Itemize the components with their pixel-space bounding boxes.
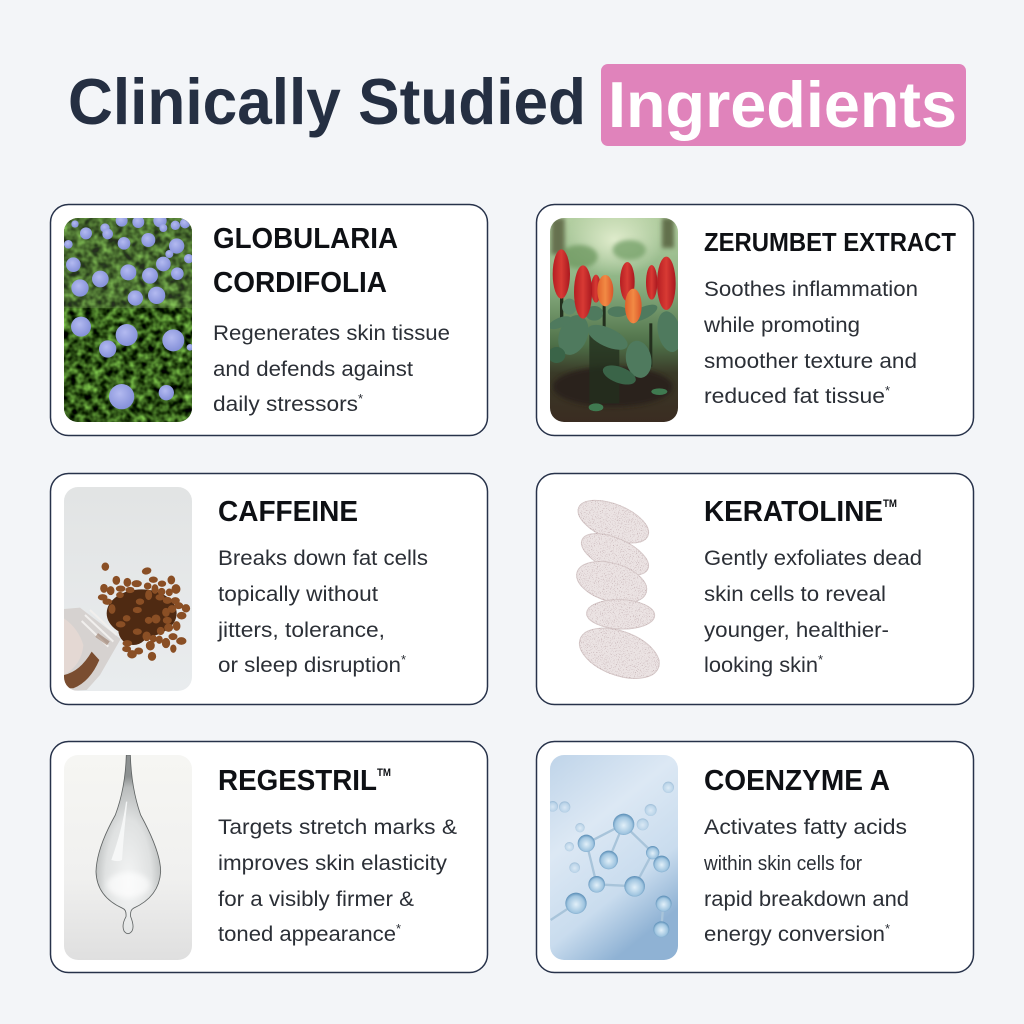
description: * xyxy=(401,652,406,667)
heading: ZERUMBET EXTRACT xyxy=(704,227,956,257)
heading: TM xyxy=(377,767,391,779)
heading: GLOBULARIA xyxy=(213,223,398,255)
description: toned appearance xyxy=(218,923,396,946)
image: red zerumbet ginger cones in forest xyxy=(550,218,678,422)
panel: Regestril xyxy=(50,742,488,972)
description: Breaks down fat cells xyxy=(218,547,428,570)
heading: COENZYME A xyxy=(704,765,890,797)
heading: CORDIFOLIA xyxy=(213,267,387,299)
description: daily stressors xyxy=(213,393,358,416)
description: * xyxy=(818,652,823,667)
description: energy conversion xyxy=(704,923,885,946)
description: Gently exfoliates dead xyxy=(704,547,922,570)
description: * xyxy=(358,391,363,406)
description xyxy=(704,547,922,677)
description: jitters, tolerance, xyxy=(217,619,385,642)
image: exfoliating scrub swatches xyxy=(572,492,666,688)
description xyxy=(218,816,457,946)
panel: Coenzyme A xyxy=(536,742,974,972)
description: improves skin elasticity xyxy=(218,852,448,875)
description: or sleep disruption xyxy=(218,654,401,677)
heading: CAFFEINE xyxy=(218,496,358,528)
description: Soothes inflammation xyxy=(704,278,918,301)
description: Regenerates skin tissue xyxy=(213,322,450,345)
image: coffee beans spilling from glass jar xyxy=(64,487,192,691)
description xyxy=(703,816,909,946)
title xyxy=(68,64,966,146)
description: * xyxy=(396,921,401,936)
description: for a visibly firmer & xyxy=(218,888,414,911)
panel: Zerumbet Extract xyxy=(536,204,974,436)
image: glassy blue molecule xyxy=(547,755,678,960)
description xyxy=(703,278,918,408)
description: Targets stretch marks & xyxy=(218,816,457,839)
beans xyxy=(107,589,177,645)
description xyxy=(213,322,450,416)
description: * xyxy=(885,383,890,398)
description: while promoting xyxy=(703,314,860,337)
heading: TM xyxy=(883,498,897,510)
description: * xyxy=(885,921,890,936)
description: younger, healthier- xyxy=(704,619,889,642)
heading xyxy=(213,223,398,299)
description xyxy=(217,547,428,677)
description: and defends against xyxy=(213,358,413,381)
panel: Keratoline xyxy=(536,474,974,704)
glass jar xyxy=(64,608,121,691)
description: within skin cells for xyxy=(703,853,862,875)
description: topically without xyxy=(218,583,378,606)
description: Activates fatty acids xyxy=(704,816,907,839)
heading: REGESTRIL xyxy=(218,765,377,797)
description: looking skin xyxy=(704,654,818,677)
description: rapid breakdown and xyxy=(704,888,909,911)
description: skin cells to reveal xyxy=(704,583,886,606)
title highlight: Ingredients: Ingredients xyxy=(608,68,957,141)
image: blue globe flowers on green foliage xyxy=(64,214,193,422)
description: smoother texture and xyxy=(704,350,917,373)
description: reduced fat tissue xyxy=(704,385,885,408)
title text: Clinically Studied: Clinically Studied xyxy=(68,65,586,138)
panel: Globularia Cordifolia xyxy=(50,204,488,436)
heading: KERATOLINE xyxy=(704,496,883,528)
image: clear serum droplet xyxy=(64,755,192,960)
panel: Caffeine xyxy=(50,474,488,704)
